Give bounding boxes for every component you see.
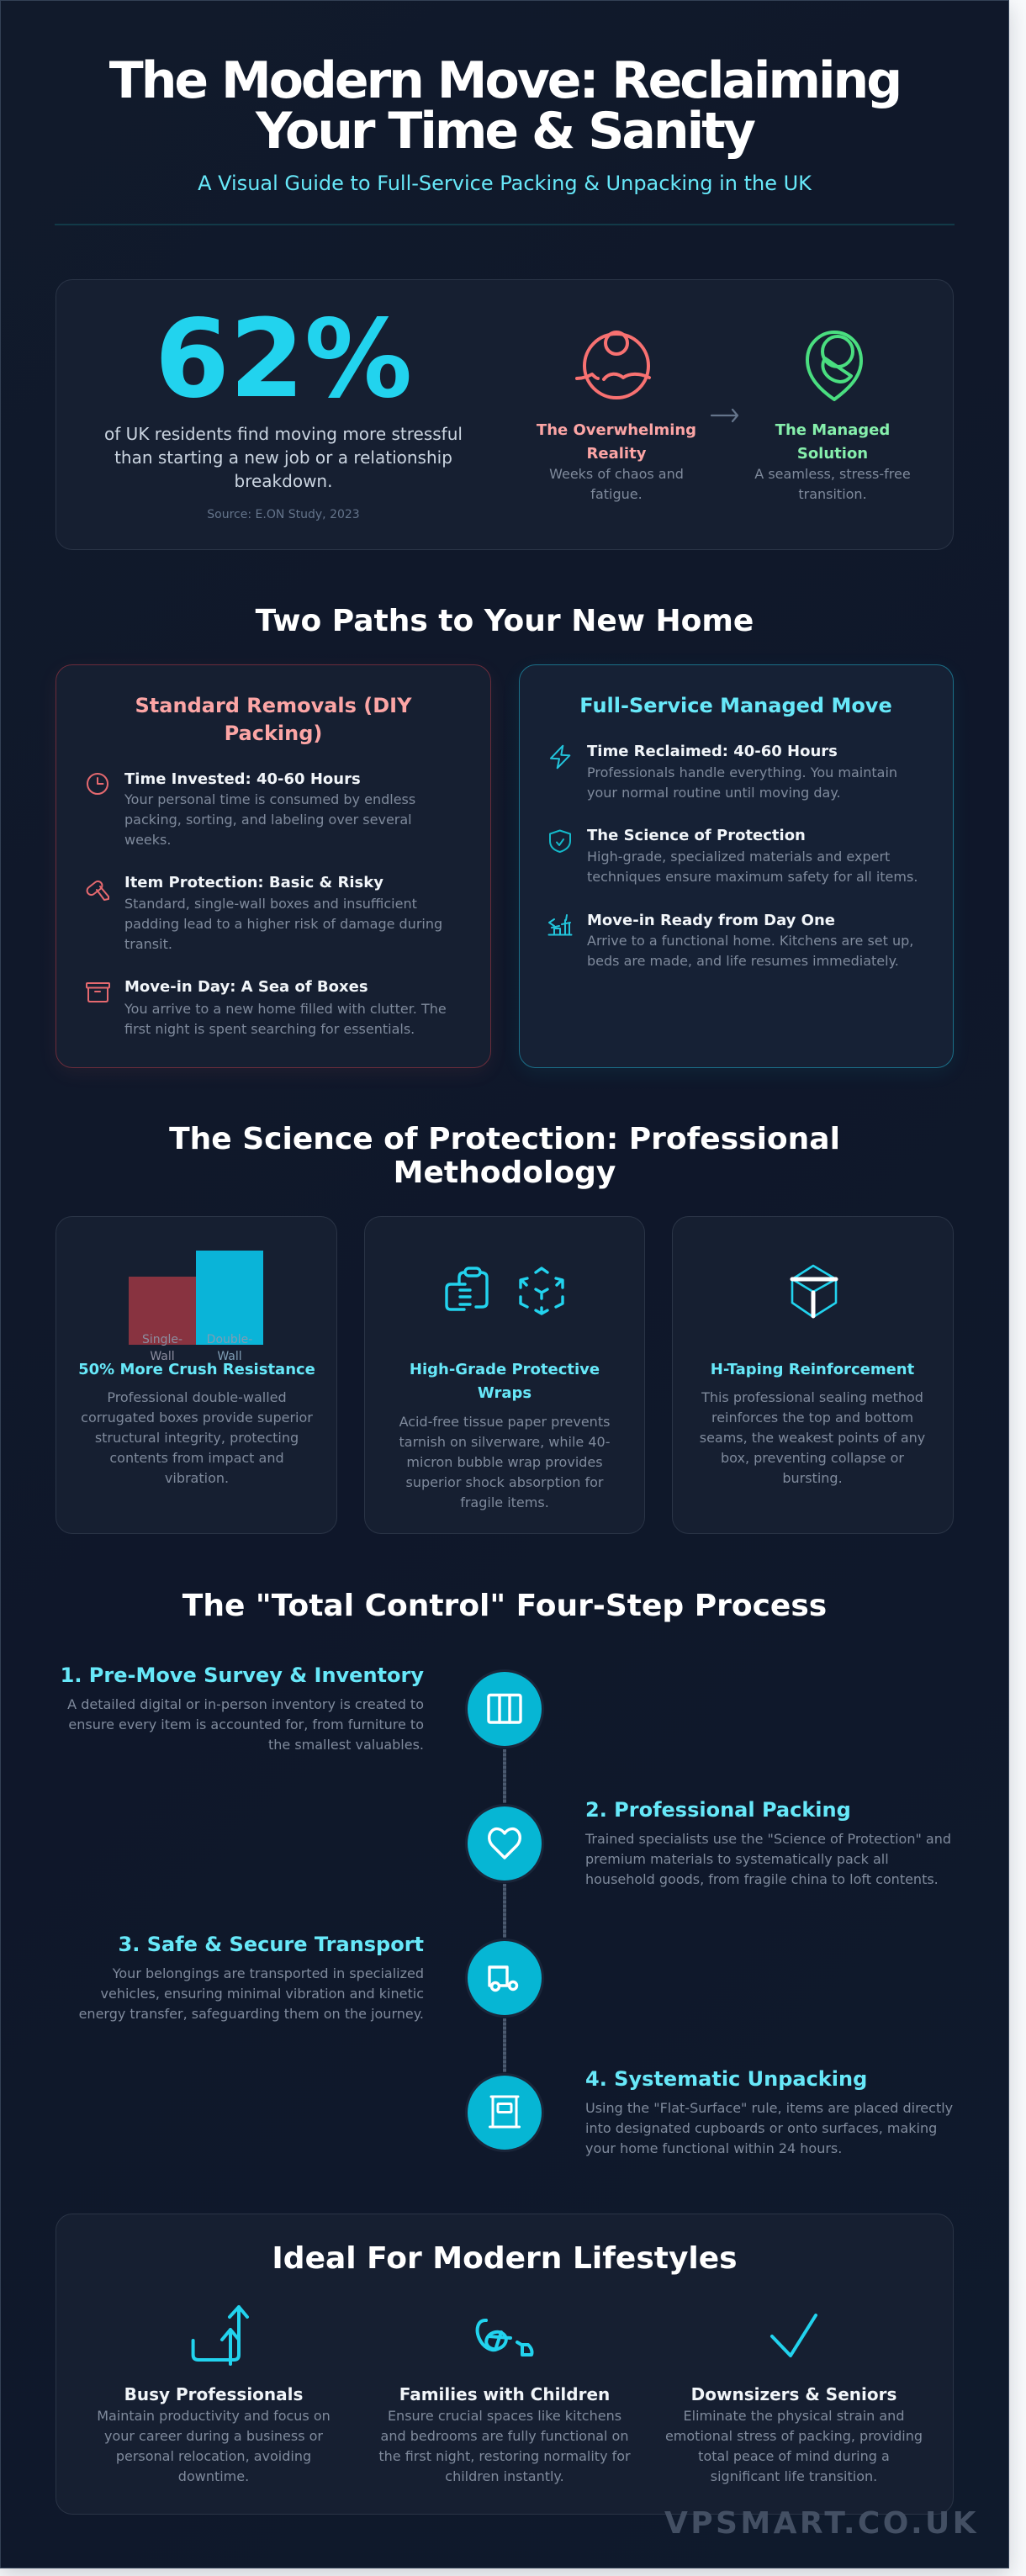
label: single-wall: Wall [150,1350,175,1363]
heading: science of protection [169,1122,840,1190]
icon: inventory grid [487,1694,522,1724]
step 2 text: household goods, from fragile china to loft contents. [585,1871,939,1887]
downsizers text: significant life transition. [711,2468,877,2484]
h-taping text [700,1389,925,1486]
downsizers text [665,2406,923,2487]
panel: standard removals [56,664,491,1068]
step 1 text: the smallest valuables. [268,1737,424,1753]
item text: time invested: Your personal time is consumed by endless [124,791,415,807]
item text: item protection: padding lead to a higher risk of damage during [124,916,442,932]
step 2 text: Trained specialists use the "Science of Protection" and [585,1831,951,1847]
icon: clock [87,773,108,795]
stat description [104,424,463,491]
managed solution heading: Solution [797,445,868,463]
item text: science of protection [587,849,918,885]
overwhelming reality text: Weeks of chaos and [549,466,684,482]
step 3 title: 3. Safe & Secure Transport [119,1933,424,1956]
h-taping text: This professional sealing method [701,1389,923,1405]
wraps text [399,1414,610,1510]
item text: time reclaimed [587,764,897,801]
wraps text: micron bubble wrap provides [406,1454,603,1470]
busy professionals text: personal relocation, avoiding [116,2448,311,2464]
families text [378,2406,631,2487]
icon: heart [488,1827,521,1859]
item: move-in day: Move-in Day: A Sea of Boxes [124,978,368,996]
icon: linked loops [476,2319,537,2359]
families text: and bedrooms are fully functional on [381,2428,628,2444]
icon: tray with arrows [190,2306,251,2367]
standard removals title: Standard Removals (DIY [135,694,411,717]
h-taping text: bursting. [782,1470,843,1486]
managed move title: Full-Service Managed Move [579,694,892,717]
item text: time reclaimed: Professionals handle everything. You maintain [587,764,897,780]
title: Your Time & Sanity [256,101,754,160]
wraps heading: High-Grade Protective [410,1361,600,1378]
icon: clipboard [445,1267,489,1311]
icon: hammer [86,880,109,901]
busy professionals text [97,2406,331,2487]
crush resistance text: structural integrity, protecting [95,1430,299,1446]
item: time invested: Time Invested: 40-60 Hours [124,770,361,788]
wraps heading [410,1361,600,1402]
panel: full-service managed move [519,664,954,1068]
families text: the first night, restoring normality for [378,2448,631,2464]
step 2 title: 2. Professional Packing [585,1798,851,1822]
crush resistance text: vibration. [165,1470,229,1486]
heading: science of protection: Methodology [394,1156,616,1190]
heading: science of protection: The Science of Protection: Professional [169,1122,840,1156]
wraps text: superior shock absorption for [406,1474,603,1490]
stat description: of UK residents find moving more stressful [104,424,463,444]
h-taping text: seams, the weakest points of any [700,1430,925,1446]
wraps text: tarnish on silverware, while 40- [399,1434,610,1450]
item: item protection: Item Protection: Basic & Risky [124,874,383,891]
step 1 text: A detailed digital or in-person inventory is created to [67,1696,424,1712]
item text: move-in ready [587,933,913,969]
item text: item protection: Standard, single-wall boxes and insufficient [124,896,417,912]
h-taping text: box, preventing collapse or [721,1450,904,1466]
step 4 text [585,2098,953,2159]
overwhelming reality heading: The Overwhelming [537,421,696,439]
downsizers text: Eliminate the physical strain and [684,2408,904,2424]
stat description: breakdown. [235,471,332,491]
title [109,51,900,160]
icon: check mark [771,2314,818,2358]
icon: door [489,2096,521,2128]
heading: two paths: Two Paths to Your New Home [256,604,754,638]
icon: shield check [549,829,571,853]
step 2 node [468,1806,542,1880]
icon: truck [488,1965,518,1992]
panel: ideal for modern lifestyles [56,2214,954,2515]
subtitle: A Visual Guide to Full-Service Packing & Unpacking in the UK [198,172,812,195]
managed solution text [754,466,911,502]
panel: h-taping [672,1216,954,1534]
managed solution text: A seamless, stress-free [754,466,911,482]
overwhelming reality heading [537,421,696,463]
source: Source: E.ON Study, 2023 [207,508,360,521]
label: single-wall: Single- [142,1333,182,1346]
stat description: than starting a new job or a relationship [114,447,452,468]
arrow [711,409,738,422]
icon: overwhelmed person [575,331,651,399]
families text: children instantly. [445,2468,564,2484]
step 2 text: premium materials to systematically pack all [585,1851,889,1867]
panel: protective wraps [364,1216,645,1534]
icon: managed solution pin [806,331,863,401]
item text: time invested: packing, sorting, and labeling over several [124,812,412,828]
crush resistance heading: 50% More Crush Resistance [78,1361,315,1378]
downsizers title: Downsizers & Seniors [691,2384,896,2404]
big stat 62%: 62% [155,297,412,422]
item text: science of protection: techniques ensure maximum safety for all items. [587,869,918,885]
step 4 text: into designated cupboards or onto surfaces, making [585,2120,937,2136]
crush resistance text: corrugated boxes provide superior [81,1410,313,1426]
standard removals title [135,694,412,745]
heading: four-step process: The "Total Control" Four-Step Process [182,1589,827,1623]
step 1 node [468,1672,542,1746]
heading: lifestyles: Ideal For Modern Lifestyles [272,2241,738,2276]
panel: hero statistic [56,279,954,550]
overwhelming reality heading: Reality [587,445,646,463]
overwhelming reality text: fatigue. [590,486,643,502]
managed solution heading: The Managed [775,421,890,439]
title: The Modern Move: Reclaiming [109,51,900,110]
busy professionals title: Busy Professionals [124,2384,303,2404]
step 4 text: Using the "Flat-Surface" rule, items are placed directly [585,2100,953,2116]
step 1 text [67,1696,424,1753]
standard removals title: Packing) [225,722,322,745]
managed solution heading [775,421,890,463]
crush resistance text [81,1389,313,1486]
wraps text: Acid-free tissue paper prevents [399,1414,610,1430]
families title: Families with Children [399,2384,610,2404]
label: double-wall: Double- [207,1333,252,1346]
step 1 title: 1. Pre-Move Survey & Inventory [61,1664,424,1687]
label: double-wall [207,1333,252,1363]
busy professionals text: your career during a business or [104,2428,323,2444]
item text: move-in day [124,1001,447,1037]
step 4 text: your home functional within 24 hours. [585,2140,842,2156]
step 3 text [79,1965,424,2022]
item text: time invested [124,791,415,848]
wraps text: fragile items. [460,1494,549,1510]
label: double-wall: Wall [217,1350,242,1363]
icon: dashed cube [519,1267,564,1315]
item: science of protection: The Science of Protection [587,827,806,844]
item text: move-in day: You arrive to a new home filled with clutter. The [124,1001,447,1017]
overwhelming reality text [549,466,684,502]
bar: single-wall [129,1277,196,1345]
crush resistance text: Professional double-walled [107,1389,287,1405]
item text: move-in day: first night is spent searching for essentials. [124,1021,415,1037]
step 3 text: Your belongings are transported in specialized [113,1965,424,1981]
icon: taped cube [791,1265,838,1319]
managed solution text: transition. [798,486,867,502]
icon: lightning bolt [550,745,570,769]
item text: time invested: weeks. [124,832,171,848]
item text: move-in ready: beds are made, and life resumes immediately. [587,953,899,969]
crush resistance text: contents from impact and [109,1450,284,1466]
item text: item protection [124,896,442,952]
busy professionals text: Maintain productivity and focus on [97,2408,331,2424]
busy professionals text: downtime. [178,2468,249,2484]
step 3 text: vehicles, ensuring minimal vibration and kinetic [101,1986,424,2002]
item: time reclaimed: Time Reclaimed: 40-60 Hours [587,743,838,760]
families text: Ensure crucial spaces like kitchens [388,2408,621,2424]
icon: home chart [548,914,572,935]
item: move-in ready: Move-in Ready from Day One [587,912,835,929]
bar: double-wall [196,1251,263,1345]
watermark: VPSMART.CO.UK [664,2506,979,2541]
bar chart: single vs double wall [129,1251,263,1363]
step 4 node [468,2076,542,2150]
panel: crush resistance [56,1216,337,1534]
item text: time reclaimed: your normal routine until moving day. [587,785,841,801]
icon: archive box [86,982,110,1002]
step 4 title: 4. Systematic Unpacking [585,2067,867,2091]
item text: science of protection: High-grade, specialized materials and expert [587,849,890,865]
step 2 text [585,1831,951,1887]
step 3 text: energy transfer, safeguarding them on the journey. [79,2006,424,2022]
downsizers text: total peace of mind during a [698,2448,890,2464]
downsizers text: emotional stress of packing, providing [665,2428,923,2444]
step 3 node [468,1941,542,2015]
item text: move-in ready: Arrive to a functional home. Kitchens are set up, [587,933,913,949]
step 1 text: ensure every item is accounted for, from furniture to [68,1716,424,1732]
item text: item protection: transit. [124,936,172,952]
h-taping text: reinforces the top and bottom [711,1410,913,1426]
h-taping heading: H-Taping Reinforcement [711,1361,914,1378]
label: single-wall [142,1333,182,1363]
wraps heading: Wraps [478,1384,532,1402]
